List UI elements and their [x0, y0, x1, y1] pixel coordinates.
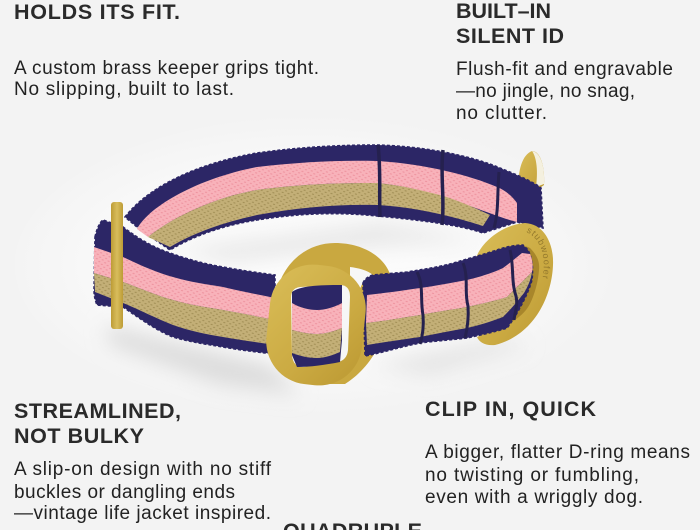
right strap keepers [417, 250, 517, 344]
block: holds its fit [14, 0, 319, 100]
heading: HOLDS ITS FIT. [14, 0, 180, 24]
body text: A slip-on design with no stiff [14, 459, 272, 480]
left side ring [111, 202, 123, 329]
back strap [125, 145, 543, 250]
body text [14, 459, 272, 524]
heading: NOT BULKY [14, 424, 144, 448]
back ring (far right) [518, 151, 544, 195]
body text: buckles or dangling ends [14, 482, 235, 503]
block: built-in silent id [456, 0, 673, 124]
center front keeper ring [262, 260, 370, 390]
engraved wordmark: stubwoofer [526, 228, 550, 279]
body text: no twisting or fumbling, [425, 465, 639, 486]
body text: No slipping, built to last. [14, 79, 234, 100]
heading: SILENT ID [456, 24, 564, 48]
heading: STREAMLINED, [14, 399, 181, 423]
body text: A bigger, flatter D-ring means [425, 442, 690, 463]
heading [14, 399, 181, 448]
center back D-ring [275, 243, 395, 384]
body text: Flush-fit and engravable [456, 59, 673, 80]
body text [14, 58, 319, 100]
body text [456, 59, 673, 124]
body text [425, 442, 690, 508]
collar illustration [93, 144, 554, 386]
body text: A custom brass keeper grips tight. [14, 58, 319, 79]
heading: CLIP IN, QUICK [425, 397, 596, 421]
heading [456, 0, 564, 48]
block: clip in quick [425, 397, 690, 508]
right strap [363, 245, 533, 356]
block: streamlined [14, 399, 272, 524]
body text: even with a wriggly dog. [425, 487, 643, 508]
soft shadows under collar [105, 222, 530, 395]
body text: no clutter. [456, 103, 547, 124]
body text: —vintage life jacket inspired. [14, 503, 271, 524]
front left strap [94, 220, 275, 354]
back strap keepers [378, 145, 499, 228]
opening of center ring [350, 267, 373, 300]
strap inside keeper [292, 285, 342, 367]
right D-ring [476, 223, 554, 346]
body text: —no jingle, no snag, [456, 81, 635, 102]
